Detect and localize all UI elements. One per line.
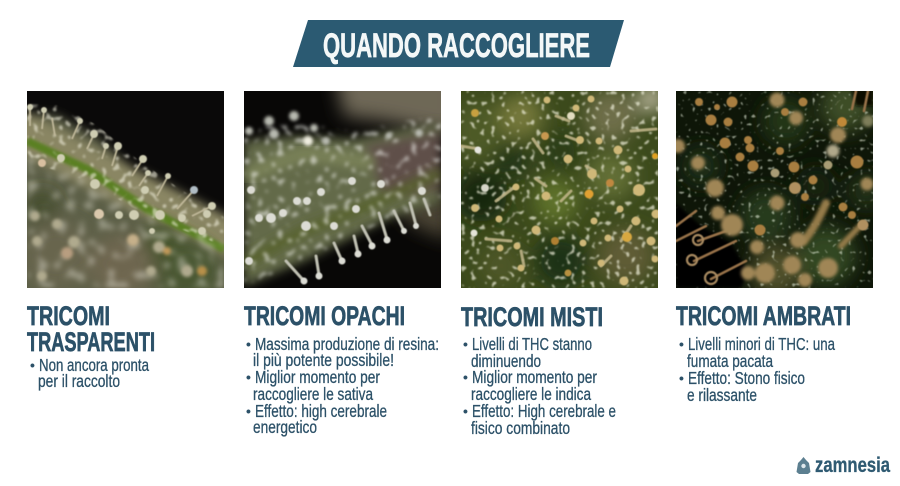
trichome heads <box>27 104 216 235</box>
bullet list <box>679 334 835 405</box>
trichome stalks <box>30 107 212 216</box>
bullet list: diminuendo <box>471 351 541 371</box>
bullet list: • <box>679 370 684 386</box>
bullet list: • <box>463 336 468 352</box>
bullet list <box>463 334 616 438</box>
bullet list: Effetto: High cerebrale e <box>472 401 616 421</box>
trichome stalks <box>286 199 430 281</box>
bullet list: il più potente possibile! <box>253 350 394 370</box>
bullet list: Miglior momento per <box>472 367 597 387</box>
heading: TRICOMI OPACHI <box>244 301 405 331</box>
bullet list: • <box>30 357 35 373</box>
bullet list: e rilassante <box>687 385 757 405</box>
bullet list: Effetto: Stono fisico <box>688 368 805 388</box>
bullet list: • <box>246 403 251 419</box>
photo: amber trichomes <box>676 91 873 288</box>
bullet list: • <box>246 336 251 352</box>
trichome heads <box>245 177 426 284</box>
trichome stalks <box>676 91 868 279</box>
title text: QUANDO RACCOGLIERE <box>323 27 590 65</box>
photo: mixed trichomes <box>461 91 658 288</box>
bullet list: • <box>679 336 684 352</box>
photo: transparent trichomes <box>27 91 224 288</box>
trichome heads <box>470 96 660 286</box>
bullet list: • <box>463 369 468 385</box>
panel: tricomi opachi <box>244 91 441 437</box>
bullet list <box>246 334 439 437</box>
bullet list: Effetto: high cerebrale <box>255 401 387 421</box>
panel: tricomi misti <box>460 91 658 434</box>
photo: cloudy trichomes <box>244 91 441 288</box>
heading <box>27 301 155 357</box>
trichome stalks <box>461 116 656 266</box>
bullet list: Livelli di THC stanno <box>472 334 592 354</box>
logo: zamnesia <box>796 454 890 477</box>
icon: zamnesia emblem <box>796 457 810 474</box>
panel: tricomi trasparenti <box>17 91 234 391</box>
bullet list: raccogliere le sativa <box>253 384 373 404</box>
bullet list: raccogliere le indica <box>471 384 591 404</box>
heading: TRASPARENTI <box>27 327 155 357</box>
title banner <box>293 20 624 67</box>
heading: TRICOMI MISTI <box>461 302 603 332</box>
trichome heads <box>695 96 868 236</box>
bullet list: • <box>246 369 251 385</box>
panel: tricomi ambrati <box>676 91 873 402</box>
bullet list: fumata pacata <box>687 351 773 371</box>
bullet list: fisico combinato <box>471 418 570 438</box>
bullet list: energetico <box>253 417 317 437</box>
bullet list: • <box>463 403 468 419</box>
bullet list <box>30 355 149 391</box>
heading: TRICOMI <box>27 301 110 331</box>
bullet list: Non ancora pronta <box>39 355 149 375</box>
bullet list: Massima produzione di resina: <box>255 334 439 354</box>
bullet list: per il raccolto <box>38 371 120 391</box>
bullet list: Livelli minori di THC: una <box>688 334 835 354</box>
bullet list: Miglior momento per <box>255 367 380 387</box>
